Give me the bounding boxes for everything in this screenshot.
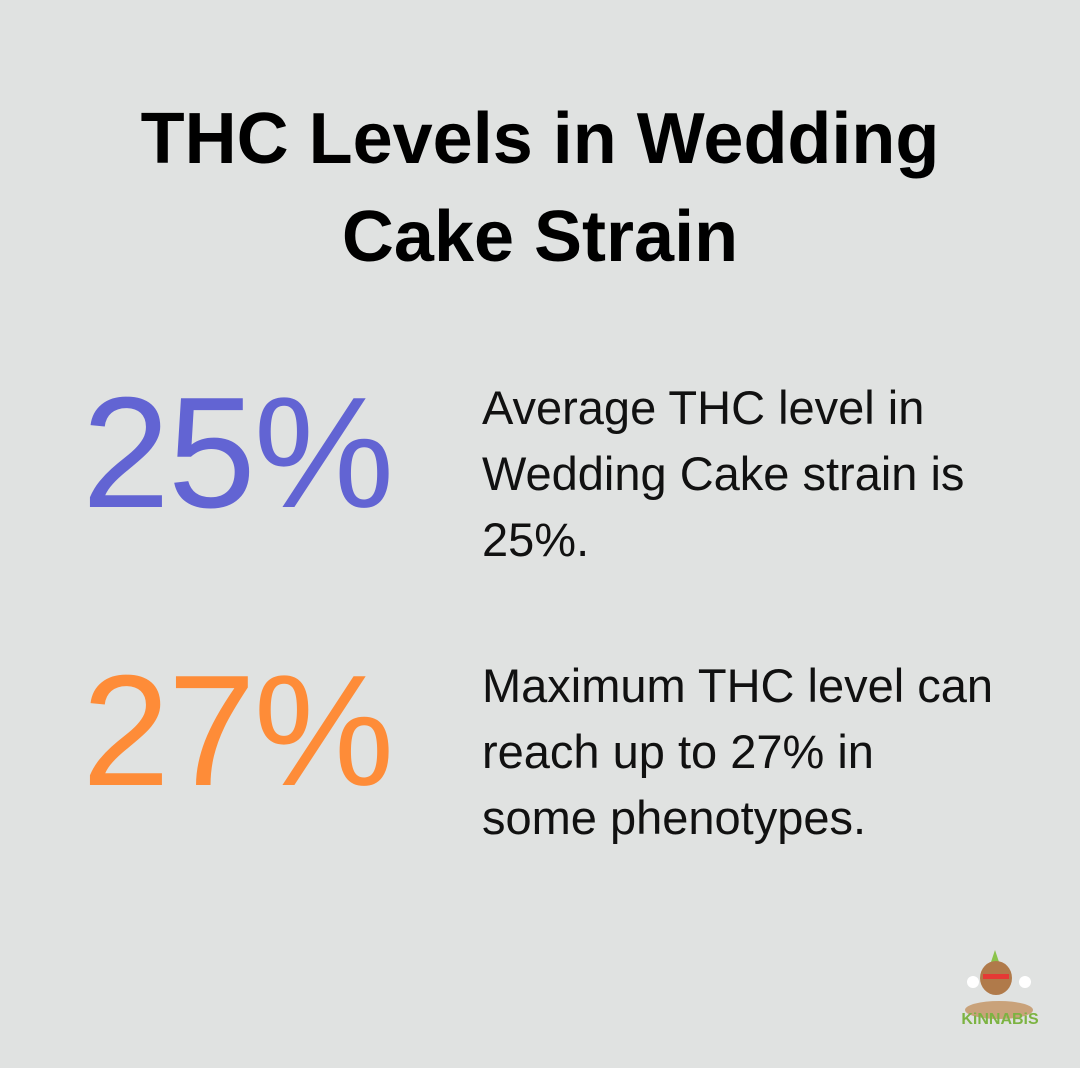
logo: [961, 950, 1039, 1028]
title: THC Levels in Wedding: [141, 99, 939, 179]
logo: KiNNABiS: [961, 1011, 1039, 1028]
text: maximum: [482, 659, 993, 844]
stat: 27%: 27%: [82, 643, 392, 819]
title: Cake Strain: [342, 197, 738, 277]
text: average: 25%.: [482, 513, 589, 566]
text: average: [482, 381, 964, 566]
text: maximum: some phenotypes.: [482, 791, 866, 844]
stat: 25%: 25%: [82, 365, 392, 541]
text: average: Average THC level in: [482, 381, 924, 434]
text: average: Wedding Cake strain is: [482, 447, 964, 500]
text: maximum: Maximum THC level can: [482, 659, 993, 712]
text: maximum: reach up to 27% in: [482, 725, 874, 778]
title: [141, 99, 939, 277]
